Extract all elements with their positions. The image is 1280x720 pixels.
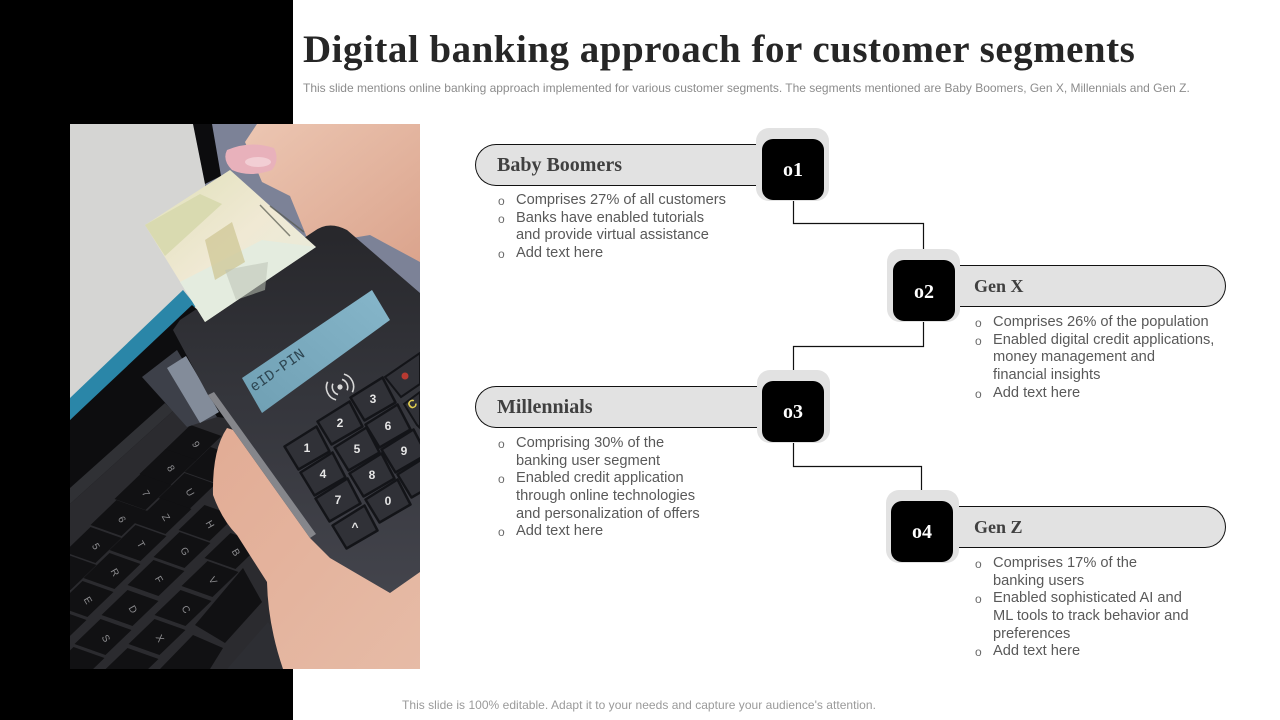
bullet list: o	[498, 247, 505, 261]
upper hand	[245, 124, 420, 262]
bullet list: Add text here	[993, 385, 1080, 401]
number badge: o3	[783, 401, 803, 423]
contactless symbol	[323, 372, 357, 402]
bullet list: Banks have enabled tutorials	[516, 210, 704, 226]
heading: Gen X	[974, 276, 1024, 296]
heading: Gen Z	[974, 517, 1023, 537]
keypad: 3	[370, 392, 377, 406]
segment 1: Baby Boomers	[475, 128, 829, 261]
laptop keyboard: 5	[89, 542, 102, 552]
bullet list: through online technologies	[516, 488, 695, 504]
keypad	[284, 378, 442, 548]
bullet list: Add text here	[993, 643, 1080, 659]
keypad: 1	[304, 441, 311, 455]
bullet list: banking users	[993, 573, 1084, 589]
lower hand	[213, 428, 420, 669]
laptop keyboard: X	[153, 633, 166, 645]
bullet list: Comprises 26% of the population	[993, 314, 1209, 330]
bullet list: ML tools to track behavior and	[993, 608, 1189, 624]
laptop keyboard: G	[177, 546, 191, 558]
monitor screen	[70, 124, 240, 424]
bullet list: financial insights	[993, 367, 1100, 383]
blue-gray background	[205, 124, 420, 320]
bullet list: o	[498, 472, 505, 486]
reader display: eID-PIN	[247, 346, 308, 396]
bullet list: Add text here	[516, 245, 603, 261]
subtitle: This slide mentions online banking approach implemented for various customer segments. The segments mentioned are Baby Boomers, Gen X, Millennials and Gen Z.	[303, 81, 1190, 95]
reader display	[242, 290, 390, 413]
number badge	[887, 249, 960, 322]
bullet list: Comprises 17% of the	[993, 555, 1137, 571]
laptop keyboard: Z	[159, 512, 171, 523]
heading: Baby Boomers	[497, 154, 622, 176]
laptop keyboard: 9	[189, 440, 202, 450]
keypad: 8	[369, 468, 376, 482]
black side band	[0, 0, 293, 720]
number badge	[756, 128, 829, 201]
bullet list: o	[975, 387, 982, 401]
card reader body	[173, 225, 442, 593]
bullet list: Add text here	[516, 523, 603, 539]
laptop keyboard: E	[81, 595, 94, 607]
bullet list: Comprises 27% of all customers	[516, 192, 726, 208]
reader side slot	[142, 350, 219, 427]
title: Digital banking approach for customer segments	[303, 28, 1135, 71]
number badge	[757, 370, 830, 443]
keypad: 7	[335, 493, 342, 507]
number badge: o2	[914, 281, 934, 303]
number badge: o4	[912, 521, 932, 543]
laptop keyboard: H	[203, 519, 216, 531]
laptop keyboard: 6	[115, 515, 128, 525]
bullet list	[975, 555, 1189, 659]
bullet list: Enabled credit application	[516, 470, 684, 486]
photo: hand inserting card into reader above laptop	[70, 124, 420, 669]
bullet list: o	[498, 212, 505, 226]
bullet list: o	[498, 194, 505, 208]
bullet list	[498, 435, 700, 539]
bullet list: o	[498, 437, 505, 451]
keypad: 9	[401, 444, 408, 458]
bullet list: o	[975, 334, 982, 348]
label bar	[950, 506, 1226, 548]
bullet list: banking user segment	[516, 453, 660, 469]
card reader body: C	[405, 396, 420, 412]
laptop keyboard: F	[152, 574, 164, 585]
bullet list: Comprising 30% of the	[516, 435, 664, 451]
keypad: 5	[354, 442, 361, 456]
laptop keyboard: 7	[139, 489, 152, 499]
red and yellow function keys	[385, 353, 420, 397]
bullet list: o	[975, 316, 982, 330]
laptop keyboard: 8	[164, 464, 177, 474]
bullet list: and provide virtual assistance	[516, 227, 709, 243]
laptop keyboard	[30, 305, 300, 684]
bullet list: o	[498, 525, 505, 539]
laptop keyboard: U	[183, 487, 196, 499]
fingernail	[225, 144, 277, 174]
laptop keyboard: B	[229, 547, 242, 559]
keypad: 2	[337, 416, 344, 430]
laptop keyboard: V	[206, 575, 219, 587]
label bar	[950, 265, 1226, 307]
bullet list: preferences	[993, 626, 1070, 642]
ID card	[145, 170, 316, 322]
bullet list: Enabled sophisticated AI and	[993, 590, 1182, 606]
laptop keyboard: S	[99, 633, 112, 645]
bullet list: o	[975, 592, 982, 606]
segment 2: Gen X	[887, 249, 1226, 401]
heading: Millennials	[497, 396, 593, 418]
keypad: 6	[385, 419, 392, 433]
number badge: o1	[783, 159, 803, 181]
laptop keyboard: C	[179, 604, 192, 616]
keypad: ^	[351, 520, 359, 534]
segment 4: Gen Z	[886, 490, 1226, 659]
bullet list: money management and	[993, 349, 1155, 365]
bullet list	[975, 314, 1214, 401]
footer note: This slide is 100% editable. Adapt it to your needs and capture your audience's attention.	[402, 698, 876, 712]
bullet list: Enabled digital credit applications,	[993, 332, 1214, 348]
bullet list	[498, 192, 726, 261]
keypad: 0	[385, 494, 392, 508]
monitor bezel	[193, 124, 221, 184]
laptop keyboard: D	[126, 604, 139, 616]
blue monitor edge	[70, 290, 196, 420]
segment 3: Millennials	[475, 370, 830, 539]
keypad: 4	[320, 467, 327, 481]
bullet list: o	[975, 557, 982, 571]
laptop keyboard: T	[134, 539, 146, 550]
laptop keyboard: R	[108, 567, 121, 579]
label bar	[475, 386, 760, 428]
bullet list: and personalization of offers	[516, 506, 700, 522]
label bar	[475, 144, 760, 186]
bullet list: o	[975, 645, 982, 659]
number badge	[886, 490, 959, 563]
